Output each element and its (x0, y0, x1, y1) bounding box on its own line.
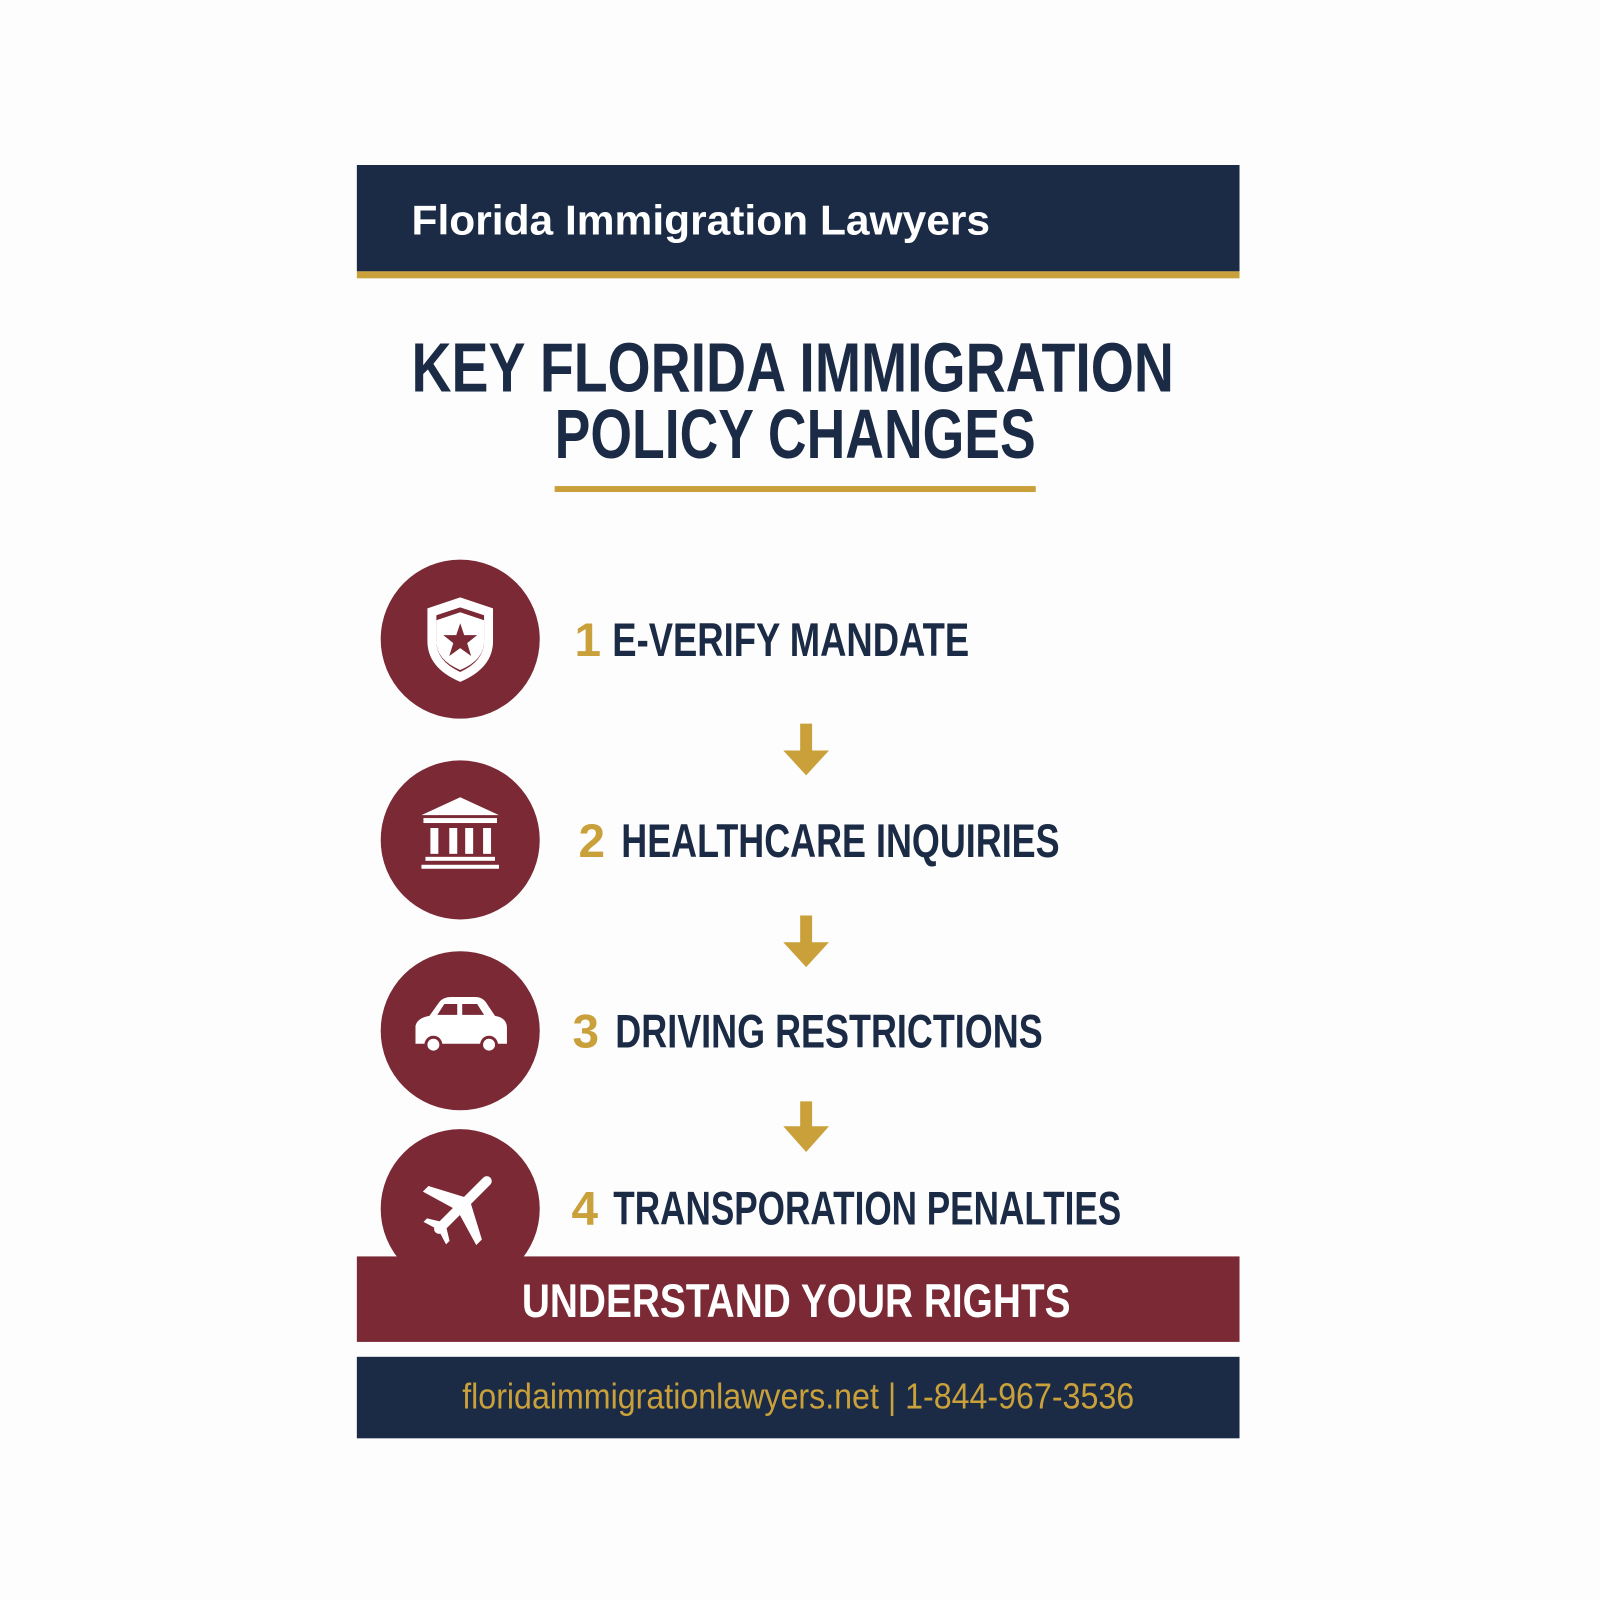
arrow 1 (783, 724, 829, 775)
item 2: healthcare (381, 760, 1060, 919)
item 2: healthcare: 2 (579, 815, 605, 868)
arrow 3 (783, 1101, 829, 1152)
title: KEY FLORIDA IMMIGRATION (412, 329, 1174, 407)
item 1: e-verify (381, 560, 969, 719)
item 4: transportation: TRANSPORATION PENALTIES (613, 1183, 1121, 1236)
title underline (555, 486, 1036, 492)
item 2: healthcare: HEALTHCARE INQUIRIES (621, 815, 1060, 868)
header banner (357, 165, 1240, 278)
call to action banner: UNDERSTAND YOUR RIGHTS (522, 1275, 1071, 1328)
item 3: driving (381, 951, 1043, 1110)
item 1: e-verify: 1 (575, 614, 601, 667)
header banner: Florida Immigration Lawyers (412, 197, 990, 244)
item 4: transportation (381, 1129, 1121, 1288)
item 1: e-verify: E-VERIFY MANDATE (612, 614, 969, 667)
title (412, 329, 1174, 473)
item 3: driving: 3 (573, 1006, 599, 1059)
title: POLICY CHANGES (555, 395, 1036, 473)
footer contact bar (357, 1357, 1240, 1438)
call to action banner (357, 1256, 1240, 1342)
item 3: driving: DRIVING RESTRICTIONS (615, 1006, 1043, 1059)
footer contact bar: floridaimmigrationlawyers.net | 1-844-967-3536 (462, 1376, 1134, 1416)
arrow 2 (783, 915, 829, 967)
item 4: transportation: 4 (572, 1183, 599, 1236)
